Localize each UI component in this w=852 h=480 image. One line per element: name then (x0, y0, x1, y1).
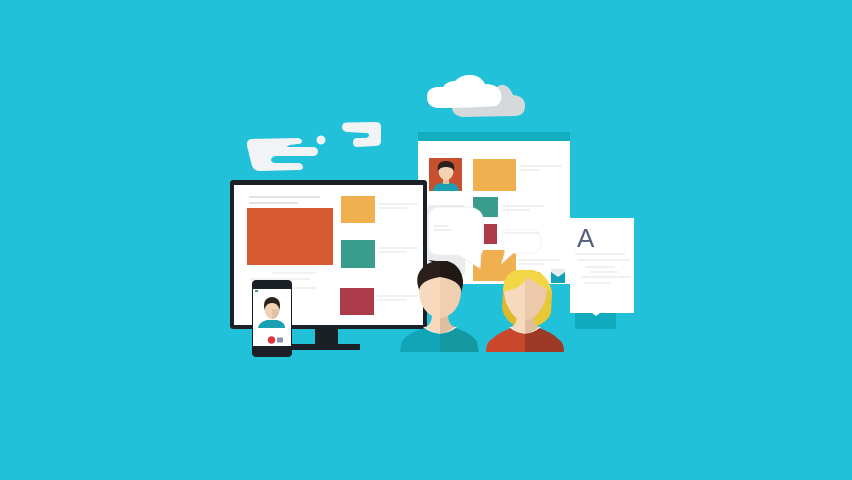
icon: small badge (277, 338, 283, 342)
hair back (502, 272, 552, 328)
tile: orange top (473, 159, 516, 191)
tile: green (473, 197, 498, 217)
callout: right speech bubble (502, 230, 541, 263)
icon: red record button (268, 336, 275, 344)
icon: cloud (427, 75, 525, 117)
text lines: monitor captions (250, 204, 418, 300)
shirt (400, 328, 440, 352)
icon: envelope (551, 269, 565, 283)
panel: browser window (418, 132, 570, 284)
neck (425, 314, 440, 334)
panel: smartphone (252, 280, 292, 357)
tile: orange bottom (473, 250, 516, 281)
person: woman (486, 270, 564, 352)
tile: red (340, 288, 374, 315)
text lines: browser captions (502, 166, 562, 264)
icon: speed cloud right (342, 122, 381, 147)
letter A: A (577, 223, 595, 253)
monitor stand (292, 328, 360, 350)
face (504, 272, 525, 320)
tile: large orange (247, 208, 333, 265)
neck (511, 314, 525, 334)
collar (509, 327, 541, 334)
tile: yellow (341, 196, 375, 223)
hair top (503, 270, 552, 292)
hair (417, 260, 463, 294)
avatar: man on phone (258, 297, 285, 328)
text lines: document (575, 254, 631, 283)
tile: red (484, 224, 497, 244)
collar (423, 327, 457, 334)
avatar: man on red tile (429, 158, 462, 191)
tile: green (341, 240, 375, 268)
callout: left speech bubble (428, 207, 483, 268)
face (419, 277, 440, 318)
icon: speed cloud left (247, 136, 326, 171)
person: man (400, 260, 479, 352)
shirt (486, 328, 525, 352)
panel: document with letter (570, 218, 634, 329)
panel: grey sheet behind bubble (427, 205, 465, 275)
heading lines (249, 197, 320, 203)
panel: desktop monitor (230, 180, 427, 350)
